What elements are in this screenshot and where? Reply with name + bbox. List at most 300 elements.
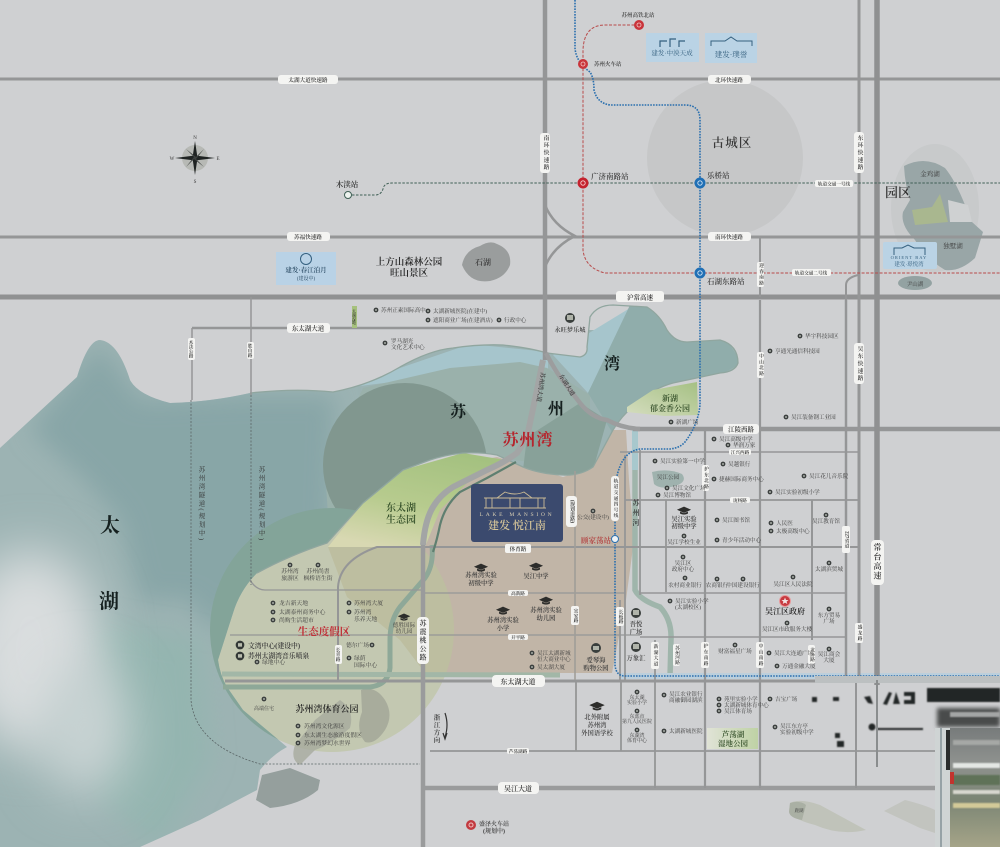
poi: BFSU Suzhou Bay foreign language school [581,702,613,737]
vertical label: Changtai expressway [871,540,884,585]
station: Shengze railway station [466,820,509,835]
poi: Wujiang agricultural bank: 商融御园湖滨 [669,696,703,704]
poi: Daliantong plaza [767,649,814,657]
poi: construction bank [726,577,760,589]
road label: south ring: 南环快速路 [715,233,743,241]
poi: high end residence [254,697,274,712]
poi: BFSU Suzhou Bay foreign language school: 北外附属 [584,712,610,721]
poi: music fountain: 苏州太湖湾音乐喷泉 [248,651,309,660]
vertical label: Line 4: 轨道交通四号线 [612,477,618,519]
project tag: Puyu [705,33,757,63]
poi: Suzhou Bay junior high: 初级中学 [468,578,494,587]
East Taihu eco garden [328,453,505,547]
road label: Sufu expressway [287,232,330,241]
poi: Wujiang senior high [712,435,753,443]
poi: construction bank: 中国建设银行 [726,581,760,589]
poi: Huayu tech park: 华宇科技园区 [805,332,839,340]
station: Shihu East Road [694,268,745,286]
old city district circle [647,80,803,236]
poi: Taihu new city hospital: 太湖新城医院(在建中) [433,307,487,315]
panel: road labels [188,75,884,794]
road label: Wujiang Avenue: 吴江大道 [504,784,532,793]
label: Xinhu tulip park: 新湖 [662,393,678,403]
project tag: Chunjiang Boyue: (建设中) [297,275,315,282]
poi: experimental primary: 苑里实验小学 [724,695,758,703]
label: Su: 苏 [450,402,468,421]
panel: metro stations [336,11,745,835]
poi: Wujiang middle school [671,507,697,530]
main project sign: Lake Mansion: 建发 悦江南 [488,518,546,532]
poi: Wujiang first high [653,457,705,465]
poi: Wujiang high: 吴江中学 [523,571,549,580]
road label: rail transit line 2 [792,269,831,276]
poi: Suzhou Bay tower: 苏州湾大厦 [354,599,383,607]
poi: taihu sport center: 太湖新城体育中心 [724,701,769,709]
poi: East Taihu primary: 实验小学 [627,699,647,706]
poi: Suzhou Bay junior high: 苏州湾实验 [465,570,497,579]
vertical label: Hudong South: 护东南路 [702,643,708,667]
road label: Pangyang [730,497,750,504]
panel: points of interest north [374,306,849,499]
poi: people hospital [769,519,793,527]
poi: Shanggou: 尚购生活超市 [279,616,314,624]
poi: Caifu plaza [718,643,752,655]
vertical label: Hudong North: 护东北路 [703,466,708,490]
poi: rural bank: 农商银行 [706,581,729,589]
label: Tai: 太 [100,514,120,537]
poi: Wujiang district government: 吴江区政府 [765,606,805,616]
Yinshan Lake [898,276,932,290]
metro line: suburban green-dark [348,183,1000,195]
poi: Xiangyue plaza: 广场 [630,627,643,636]
main project sign: Lake Mansion: LAKE MANSION [480,512,554,518]
poi: Wuyue bank: 吴越银行 [728,460,751,468]
vertical label: Zhongshan South [756,642,764,668]
vertical label: Yingchun: 迎春南路 [758,262,763,287]
poi: Wantong finance: 万通金融大厦 [782,662,816,670]
poi: Shanggou [271,616,314,624]
station: Gujiadang: 顾家荡站 [581,535,611,545]
vertical label: Shengze road [855,623,863,643]
poi: Leyang: 苏州湾 [354,608,372,616]
poi: Huayu tech park [798,332,839,340]
poi: Suzhou Zhengsu high school: 苏州正素国际高中 [381,306,426,314]
label: Xinhu tulip park: 郁金香公园 [650,403,690,413]
poi: bus station: 公交(建设中) [577,513,609,521]
vertical label: Yijia Road [571,606,579,625]
poi: Longji [271,599,308,607]
vertical label: Hudong North [702,465,709,491]
poi: civic service [762,621,813,633]
vertical label: Qingshan Road [247,342,254,359]
poi: Jiehe business: 捷赫国际商务中心 [719,475,764,483]
poi: new city hospital [662,727,703,735]
label: Yinshan Lake: 尹山湖 [907,280,924,288]
project tag: Orient Bay [883,242,937,269]
poi: green intl center [347,654,377,669]
label: Wujiang Park [652,470,684,488]
vertical label: Zhongshan South: 中山南路 [758,643,763,667]
poi: Wujiang agricultural bank [662,690,703,704]
vertical label: Shengze road: 盛龙路 [856,624,862,642]
icon: heritage building [484,492,546,508]
poi: Wuyue bank [721,460,751,468]
small green strip label: 太湖湿地 [351,309,356,325]
station: Guangji South Road [578,171,629,188]
image artifact: distorted corner [812,676,1000,847]
vertical label: Qingshan Road: 胜山路 [247,343,253,359]
poi: Wujiang school: 吴江学校生业 [667,538,701,546]
poi: Wenwan center: 文湾中心(建设中) [248,641,300,650]
poi: Wujiang school [667,534,701,546]
poi: civic service: 吴江区市政服务大楼 [762,625,813,633]
metro line: blue dotted [575,0,1000,676]
poi: Taiji center: 太极高级中心 [776,527,810,535]
poi: people hospital: 人民医 [776,519,793,527]
poi: Wujiang agricultural bank: 吴江农业银行 [669,690,703,698]
poi: kindergarten [393,614,416,635]
vertical label: Hudong South [701,642,709,668]
poi: Wujiang Wanhua: 吴江东方亭 [780,722,808,730]
poi: Wujiang museum [656,491,691,499]
vertical label: 227 national road: 227省道 [844,531,849,549]
panel: points of interest south [581,690,814,744]
water outline [250,305,738,573]
poi: Suzhou Bay kindergarten: 幼儿园 [537,613,555,622]
road label: Taihu Avenue expressway [278,75,338,84]
Shihu lake [462,242,510,281]
vertical label: Wudong expressway [854,343,864,384]
poi: sports center [627,728,648,744]
poi: Xiangyue plaza: 吾悦 [630,619,643,628]
poi: rural credit: 农村商业银行 [668,581,702,589]
poi: Wujiang culture plaza: 吴江文化广场 [672,484,706,492]
label: Zhou: 州 [548,400,564,418]
poi: Wujiang middle school: 吴江实验 [671,514,697,523]
poi: youth center [715,536,762,544]
poi: East Taihu primary [627,690,647,706]
poi: Wujiang district government [765,596,805,616]
project tag: Puyu: 建发·璞誉 [715,49,748,59]
poi: Wuxian people hospital [622,709,652,725]
road label: Sufu expressway: 苏福快速路 [294,233,322,241]
poi: Jibao plaza [768,695,798,703]
vertical label: Mudu road: 木渎公路 [188,339,194,360]
poi: culture source [296,722,345,730]
poi: kindergarten: 幼儿园 [396,627,413,635]
vertical label: Line 4 [611,476,619,521]
label: Shangfangshan forest park: 上方山森林公园 [376,256,443,268]
label: Suzhou Bay sports park: 苏州湾体育公园 [295,703,359,714]
poi: Longji: 龙吉新天地 [279,599,308,607]
station: Shengze railway station: 盛泽火车站 [479,820,509,828]
label: Jinji Lake: 金鸡湖 [920,169,940,178]
poi: district court: 吴江区人民法院 [773,580,813,588]
poi: Wujiang experimental primary: (太湖校区) [675,603,701,611]
station: Suzhou railway station: 苏州火车站 [594,60,622,68]
station: Mudu [336,179,359,198]
compass rose [170,136,220,185]
road label: East Taihu Avenue lower: 东太湖大道 [500,677,536,686]
poi: Taihu tower [530,663,565,671]
planned tunnels dashed [191,395,420,764]
poi: bus station [577,509,609,521]
poi: district court [773,575,813,588]
station: Shihu East Road: 石湖东路站 [707,276,745,286]
poi: education bureau [812,513,840,525]
poi: Aegean mall: 爱琴海 [587,655,606,664]
poi: Wanxianghui [627,642,646,662]
road label: Jiangxing [729,449,751,456]
metro line: red [583,25,1000,273]
poi: library [715,516,750,524]
poi: Wujiang steel park: 吴江装备钢工业园 [791,413,836,421]
poi: Daliantong plaza: 吴江大连通广场 [774,649,814,657]
label: Suzhou Bay red: 苏州湾 [502,430,554,449]
poi: Suzhou Bay tourist area [281,563,299,582]
road label: Sports Road: 体育路 [510,545,527,553]
label: Ludang wetland park [707,728,758,749]
compass rose: N [193,136,197,141]
poi: Suzhou Bay primary [487,607,519,632]
ecological resort ring [210,508,454,752]
poi: gov center: 吴江区 [675,559,692,567]
vertical label: Longze road [808,645,815,664]
poi: Wujiang elementary: 吴江实验初级小学 [775,488,820,496]
poi: Wujiang museum: 吴江博物馆 [663,491,691,499]
road label: Gaoxin Road: 高新路 [511,590,525,597]
poi: Wujiang steel park [784,413,836,421]
road label: rail transit line 1: 轨道交通一号线 [818,180,850,188]
poi: BFSU Suzhou Bay foreign language school: 外国语学校 [581,728,613,737]
vertical label: Yingchun [757,262,764,287]
poi: Leyang [347,608,377,623]
station: Leqiao [694,170,730,188]
poi: Wujiang chamber: 大厦 [823,656,835,664]
poi: Wanxianghui: 万象汇 [627,653,646,662]
poi: Wujiang children hospital: 吴江花儿音乐院 [809,472,849,480]
poi: East Taihu primary: 东太湖 [629,694,645,701]
vertical label: Zhongshan North [757,352,764,378]
vertical label: Suzhou Bay Avenue: 苏州湾大道 [535,372,547,403]
road label: Kaiping Road: 开平路 [511,634,525,641]
road label: north ring: 北环快速路 [715,76,743,84]
label: Hu: 湖 [99,590,119,613]
road label: north ring [708,75,751,84]
vertical label: Longze road: 龙泽路 [809,647,814,663]
direction label: to Zhejiang with arrow: 浙江方向 [432,713,440,744]
Shihu lake: 石湖 [475,257,491,267]
poi: Yutong tech park [768,347,820,355]
vertical label: east ring: 东环快速路 [856,134,863,171]
poi: Suzhou Shangshu [304,563,333,582]
direction label: to Zhejiang with arrow [432,713,447,744]
poi: Taiji center [769,527,810,535]
poi: music fountain [236,651,309,660]
poi: green intl center: 绿荫 [354,654,366,662]
vertical label: Mudu road [188,338,195,360]
label: eco resort red: 生态度假区 [298,625,351,638]
label: East Taihu eco garden: 生态园 [386,513,416,526]
station: Suzhou railway station [578,59,622,69]
poi: Wujiang senior high: 吴江高级中学 [719,435,753,443]
panel: points of interest central schools [465,509,646,672]
vertical label: Suzhen-tao highway [417,617,429,664]
station: Shengze railway station: (规划中) [483,827,505,835]
vertical label: Wudong expressway: 吴东快速路 [856,345,863,382]
poi: library: 吴江图书馆 [722,516,750,524]
poi: Greenland center: 绿地中心 [262,658,285,666]
label: Shangfangshan forest park [376,256,443,279]
poi: Dongfang trade plaza: 广场 [823,617,835,625]
vertical label: planned road [566,496,577,527]
poi: culture center: 罗马湖光 [391,337,414,345]
road label: Wujiang Avenue [498,782,539,794]
poi: Wujiang children hospital [802,472,849,480]
poi: Wantong finance [775,662,816,670]
vertical label: tunnel planned 2: 苏州湾隧道(规划中) [258,465,265,542]
compass rose: S [194,180,197,185]
poi: Jiehe business [712,475,764,483]
poi: Xiangyue plaza [630,608,643,636]
poi: Suzhou Bay tourist area: 旅游区 [281,574,299,582]
poi: Wujiang Wanhua [773,722,814,736]
label: East Taihu eco garden: 东太湖 [386,501,416,514]
poi: Deer plaza [346,641,374,649]
poi: Taihu Taizhou business center [271,608,326,616]
vertical label: Dongwu Road [335,645,342,664]
poi: Aegean mall: 购物公园 [583,663,609,672]
poi: plaza [426,316,493,324]
poi: plaza: 遮阳商业广场(在建酒店) [433,316,493,324]
project tag: Orient Bay: 建发·璟悦湾 [894,260,924,268]
poi: green intl center: 国际中心 [354,661,377,669]
station: Mudu: 木渎站 [336,179,359,189]
road label: Jiangxing: 江兴西路 [731,449,750,456]
road label: Huchang expressway [616,291,664,302]
poi: Suzhou Zhengsu high school [374,306,426,314]
poi: Yongwang mall: 永旺梦乐城 [555,326,586,334]
poi: Xincheng commercial [530,649,571,663]
road label: Huchang expressway: 沪常高速 [627,292,654,302]
Xinhu tulip park [627,382,698,416]
poi: Deer plaza: 德尔广场 [346,641,369,649]
vertical label: Suzhou River road [673,644,680,666]
project tag: Zhongyang Tiancheng: 建发·中泱天成 [651,48,693,57]
station: Leqiao: 乐桥站 [707,170,730,180]
label: Shangfangshan forest park: 旺山景区 [390,267,428,279]
vertical label: Xinhu Avenue: 新湖大道 [652,643,658,668]
road label: East Taihu Avenue upper [287,323,330,333]
poi: rural credit [668,576,702,589]
poi: admin center [497,316,527,324]
tan residential district [328,430,634,673]
poi: Wuxian people hospital: 东部市 [629,713,645,720]
poi: culture source: 苏州湾文化源区 [304,722,345,730]
poi: Yutong tech park: 亨通光通信科技园 [775,347,820,355]
panel: jinji and dushu lakes [885,144,983,290]
poi: Wujiang stadium: 吴江体育场 [724,707,752,715]
project tag: Chunjiang Boyue [276,252,336,285]
vertical label: Xinhu Avenue [651,642,659,669]
vertical label: planned road: (规划道路) [569,500,574,523]
poi: admin center: 行政中心 [504,316,527,324]
vertical label: Suzhou River: 苏州河 [632,498,640,529]
poi: Wujiang chamber: 吴江商会 [818,650,841,658]
old city district circle: 古城区 [712,135,752,150]
big lake and area names [99,256,758,749]
vertical label: Yijia Road: 宜家路 [572,608,578,624]
poi: Xincheng commercial: 恒大商业中心 [537,655,571,663]
small green strip label [351,306,357,328]
poi: Suzhou Bay tourist area: 苏州湾 [281,567,299,575]
poi: experimental primary [717,695,758,703]
poi: Jibao plaza: 吉宝广场 [775,695,798,703]
poi: Suzhou Shangshu: 枫桥语生街 [304,574,333,582]
poi: education bureau: 吴江教育馆 [812,517,840,525]
poi: Xinhu plaza [669,418,699,426]
poi: China Resources: 华润万家 [733,441,756,449]
label: Wan: 湾 [604,354,621,373]
vertical label: Zhongshan North: 中山北路 [758,353,763,377]
poi: Taihu new city hospital [426,307,487,315]
poi: Greenland center [255,658,285,666]
road label: Taihu Avenue expressway: 太湖大道快速路 [288,76,328,84]
road label: Sports Road [505,544,531,553]
poi: Taihu trade city [815,561,843,573]
poi: sports center: 体育中心 [627,737,648,744]
poi: Wuxian people hospital: 第九人民医院 [622,718,652,725]
poi: Suzhou Shangshu: 苏州尚書 [306,567,330,575]
panel: points of interest Wujiang centre [667,507,843,670]
station: Suzhou high-speed north [621,11,655,30]
road label: Jiangling West Road: 江陵西路 [728,424,754,434]
poi: Xinhu plaza: 新湖广场 [676,418,699,426]
compass rose: E [216,157,220,162]
poi: Suzhou Bay junior high [465,564,497,587]
label: Ludang wetland park: 湿地公园 [718,738,748,748]
vertical label: Suzhou River road: 苏州河路 [673,645,679,666]
poi: BFSU Suzhou Bay foreign language school: 苏州湾 [588,720,607,729]
poi: Wenwan center [236,641,300,650]
label: park district: 园区 [885,185,911,200]
vertical label: Changban: 长板路 [618,609,623,625]
poi: Wujiang first high: 吴江实验第一中学 [660,457,705,465]
poi: China Resources [726,441,756,449]
road label: Pangyang: 庞杨路 [733,497,747,504]
poi: Aegean mall [583,643,609,672]
road label: Ludang Lake road [507,748,529,755]
poi: Taihu Taizhou business center: 太湖泰州商务中心 [279,608,326,616]
vertical label: Changtai expressway: 常台高速 [872,542,882,581]
label: East Taihu eco garden [386,501,416,526]
vertical label: west ring: 南环快速路 [542,134,549,171]
poi: sports center: 东湖湾 [629,732,645,739]
vertical label: Suzhen-tao highway: 苏震桃公路 [418,618,427,662]
poi: Suzhou Bay kindergarten [530,597,562,622]
poi: Xincheng commercial: 吴江太湖新城 [537,649,571,657]
poi: Wujiang middle school: 初级中学 [671,521,697,530]
panel: points of interest resort [236,563,416,747]
road label: south ring [708,232,751,241]
station: Guangji South Road: 广济南路站 [591,171,629,181]
road label: East Taihu Avenue lower [492,675,545,687]
poi: Dongfang trade plaza: 东方贸易 [818,611,841,619]
poi: high end residence: 高端住宅 [254,705,274,712]
label: Wujiang Park: 吴江公园 [657,473,680,481]
poi: Wujiang chamber [818,647,841,664]
poi: Wujiang high [523,563,549,580]
